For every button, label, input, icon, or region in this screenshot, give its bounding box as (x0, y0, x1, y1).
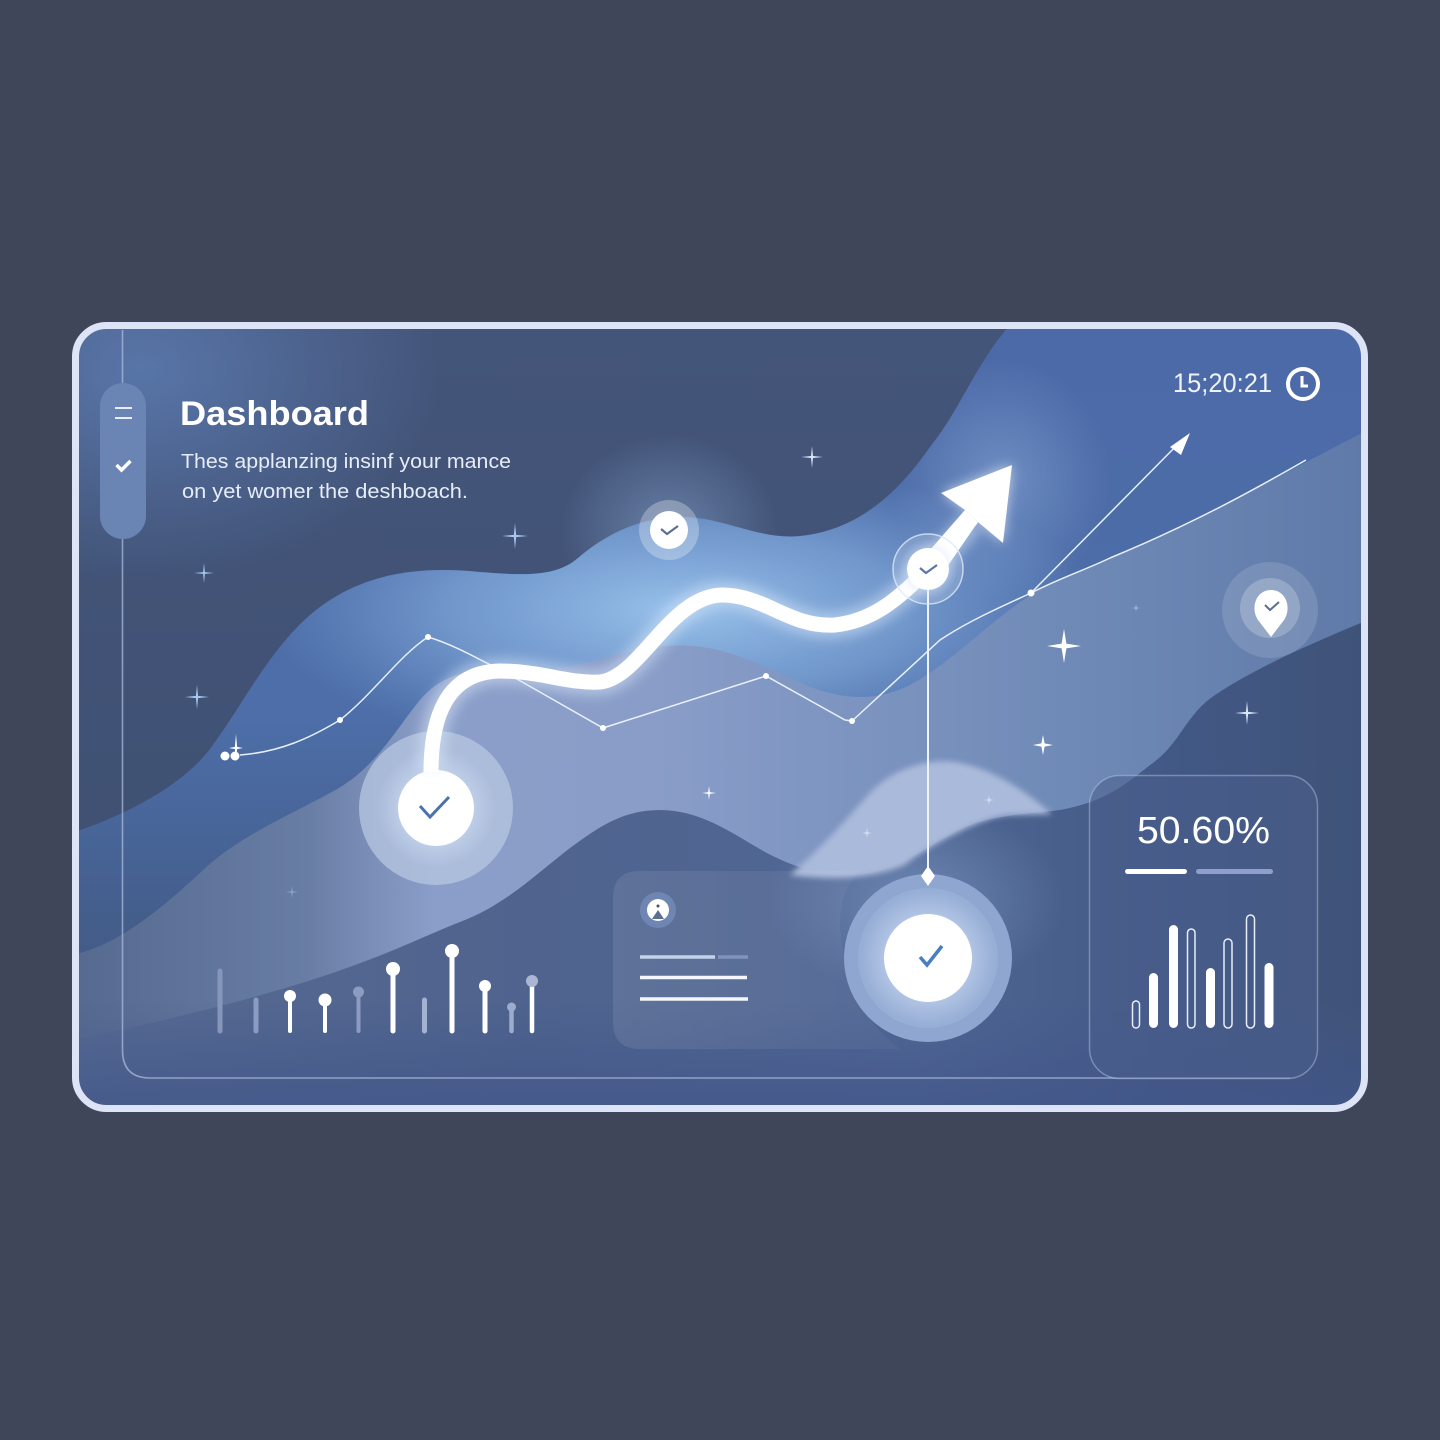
main highlight line (431, 518, 972, 772)
wave: blue band glow (304, 389, 1084, 706)
icon: avatar (640, 892, 676, 928)
side navigation pill (100, 383, 146, 539)
data points (220, 590, 1034, 760)
clock time: 15;20:21 (1173, 368, 1272, 398)
connector arrow tip (921, 866, 935, 886)
thin trend line (220, 433, 1306, 760)
sparkles (185, 446, 1259, 898)
panel background (79, 329, 1361, 1105)
icon: check (116, 461, 130, 470)
main arrow shaft (916, 510, 978, 580)
stat progress bars (1125, 869, 1273, 874)
main arrow head (941, 465, 1012, 543)
node: arrow check (893, 534, 963, 604)
node: start check (359, 731, 513, 885)
band edge line (1031, 460, 1306, 593)
dashboard illustration (72, 322, 1368, 1112)
glow under main line (431, 522, 972, 770)
lollipop chart (220, 944, 538, 1031)
icon: clock (1288, 369, 1318, 399)
wave: pale highlight (790, 761, 1052, 878)
text placeholder lines (640, 957, 748, 999)
location pin marker (1222, 562, 1318, 658)
wave: bottom band (72, 620, 1368, 1112)
wave: mid band (79, 434, 1361, 1038)
connector line (927, 590, 929, 872)
panel border (76, 326, 1364, 1108)
wave: blue band (79, 329, 1361, 954)
wave: bottom shade (79, 1057, 1361, 1105)
description text: on yet womer the deshboach. (182, 480, 468, 503)
node: top check (639, 500, 699, 560)
stat value: 50.60% (1137, 810, 1270, 852)
wave: bottom glow (806, 836, 1028, 954)
panel: summary card (613, 871, 900, 1049)
node: confirmation check (844, 874, 1012, 1042)
description text (181, 450, 511, 503)
arrow head: thin arrow (1170, 433, 1190, 455)
stat bar chart (1132, 915, 1274, 1028)
description text: Thes applanzing insinf your mance (181, 450, 511, 473)
icon: menu (115, 408, 132, 418)
inner frame line (122, 330, 1290, 1078)
panel: stat card (1090, 776, 1318, 1078)
title: Dashboard (180, 395, 369, 433)
